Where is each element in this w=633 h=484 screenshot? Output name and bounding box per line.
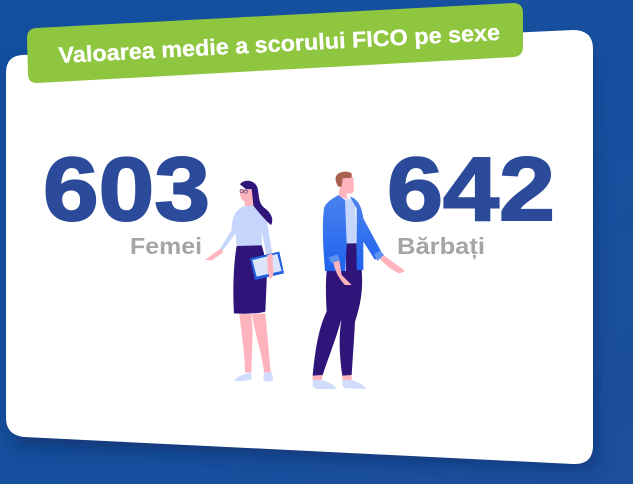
icon: man in blue jacket bbox=[313, 172, 405, 389]
icon: woman with clipboard bbox=[205, 181, 284, 382]
label: men: Bărbați bbox=[397, 233, 485, 260]
number: women score: 603 bbox=[43, 140, 210, 240]
title: Valoarea medie a scorului FICO pe sexe bbox=[58, 20, 501, 68]
card shadow bbox=[14, 46, 594, 466]
number: men score: 642 bbox=[387, 140, 555, 240]
title banner bbox=[27, 3, 523, 83]
label: women: Femei bbox=[130, 233, 202, 259]
